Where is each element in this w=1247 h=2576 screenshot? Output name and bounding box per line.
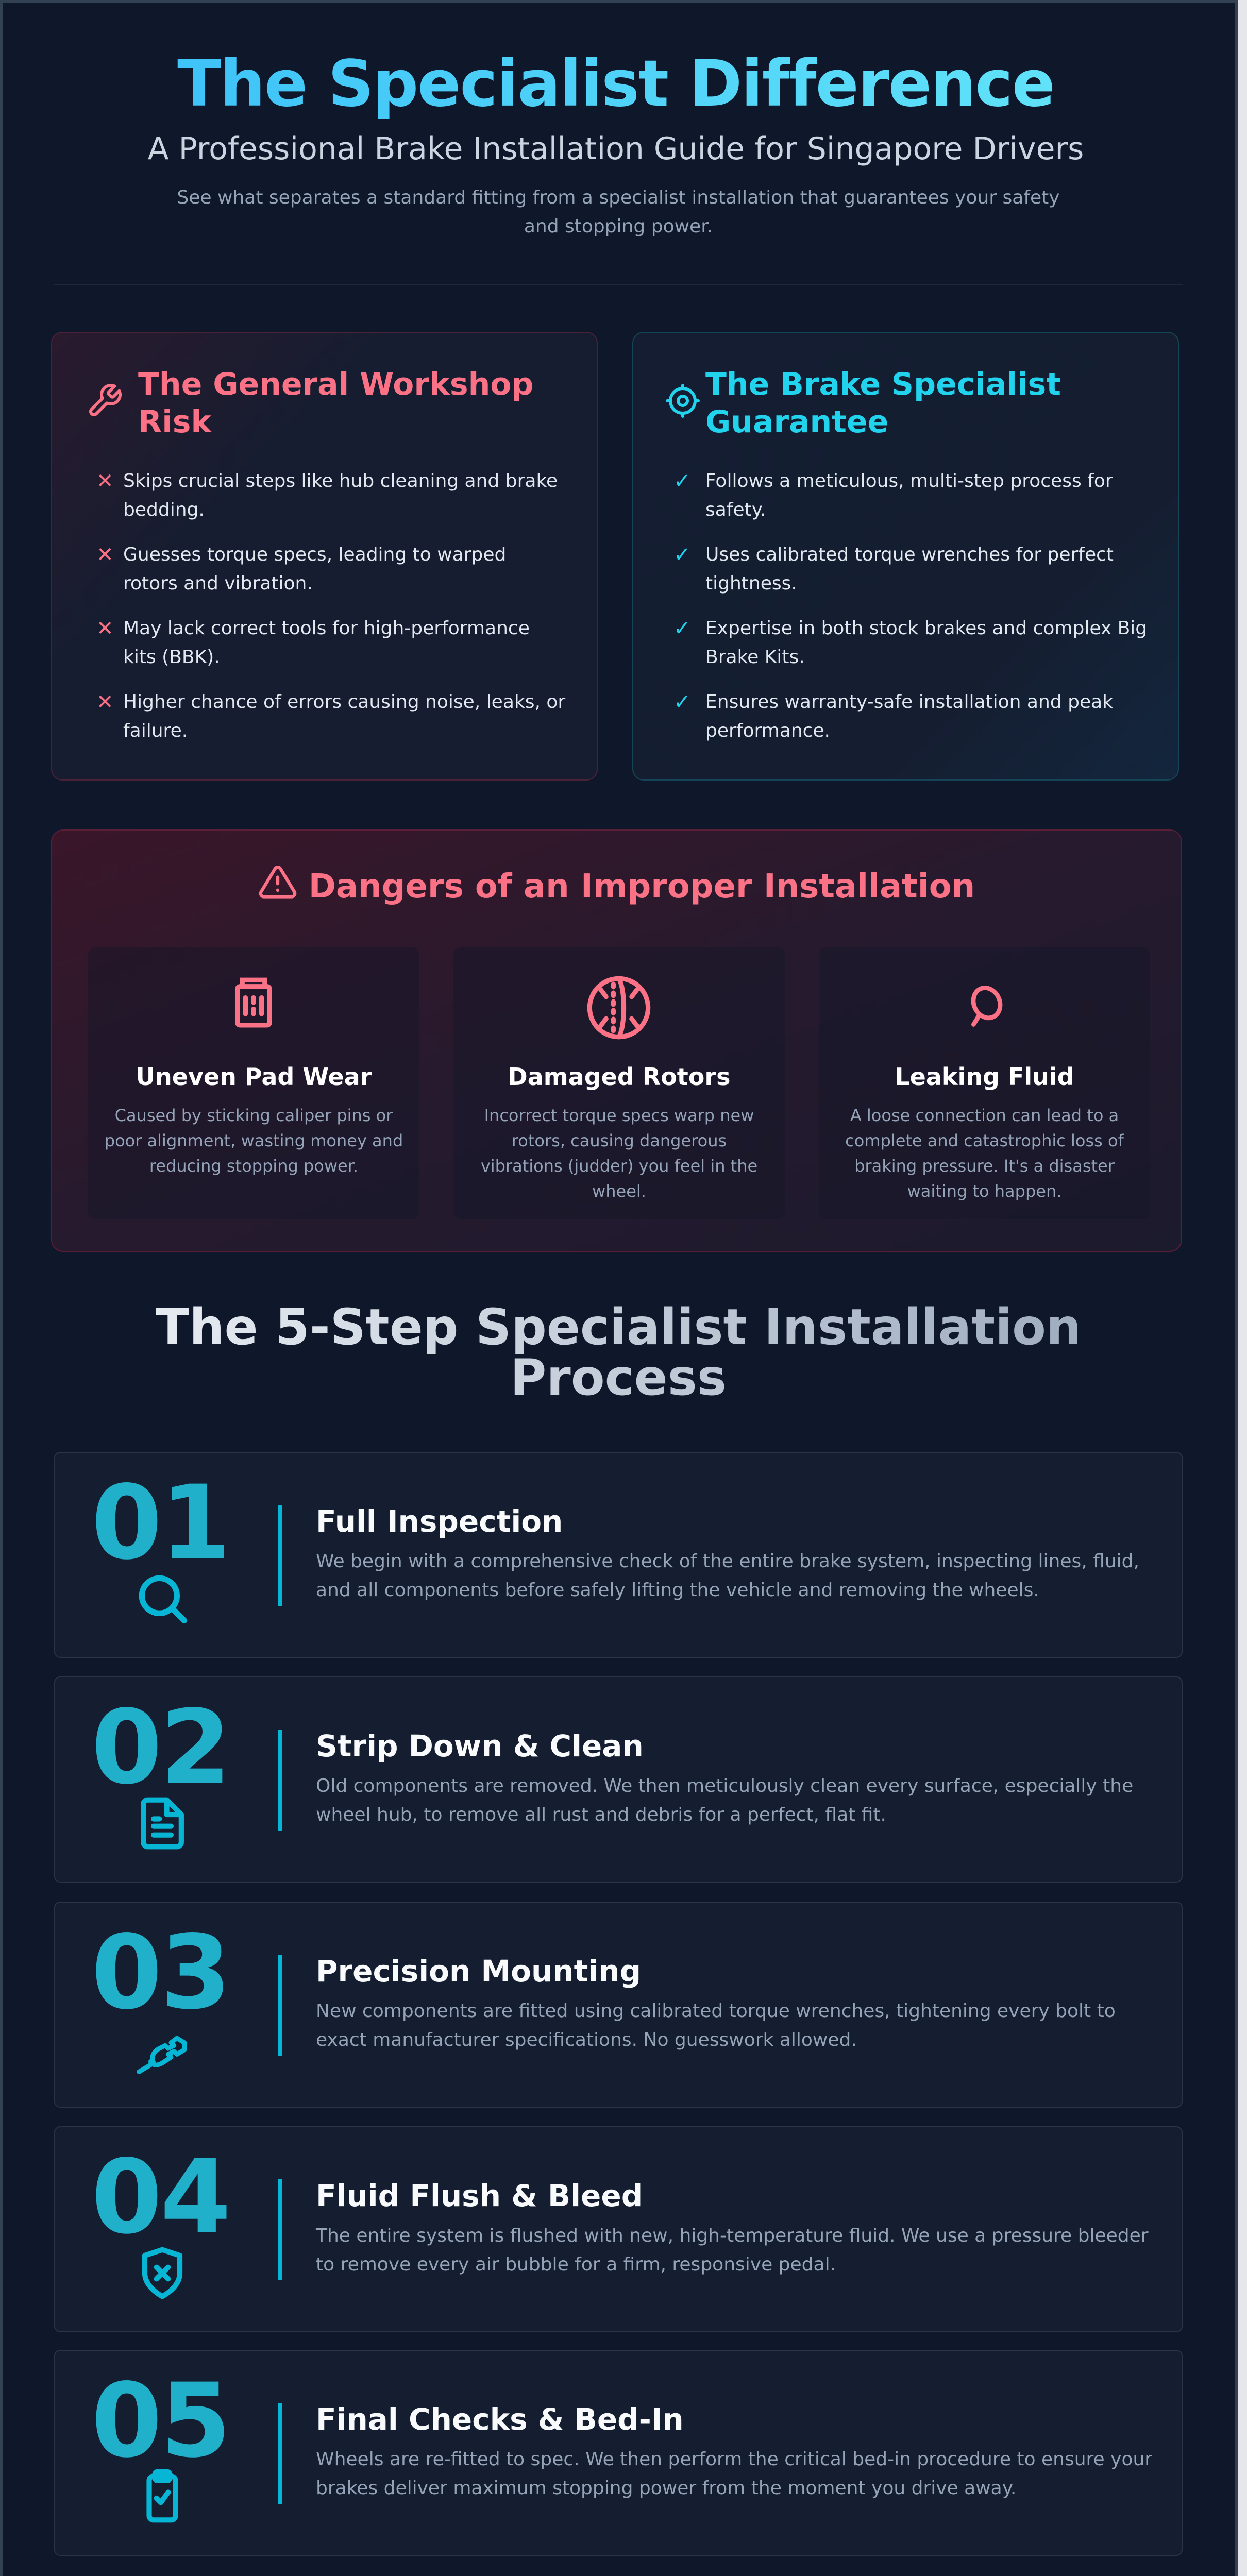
icon: magnifier: [139, 1575, 188, 1624]
intro text: [177, 187, 1060, 237]
icon: document: [141, 1797, 184, 1850]
step 3: [54, 1902, 1183, 2108]
list: guarantees: Ensures warranty-safe installation and peak performance.: [705, 691, 1113, 741]
step 3: 03: [91, 1913, 229, 2032]
step 5: Wheels are re-fitted to spec. We then perform the critical bed-in procedure to ensure your brakes deliver maximum stopping power from the moment you drive away.: [316, 2449, 1152, 2499]
list: risks: ✕: [96, 469, 114, 493]
step 1: [54, 1452, 1183, 1658]
step 5: 05: [91, 2361, 229, 2480]
step 5: [54, 2350, 1183, 2556]
list: risks: ✕: [96, 690, 114, 714]
step 4: [54, 2126, 1183, 2332]
list: risks: [96, 469, 566, 741]
card: leaking fluid: A loose connection can lead to a complete and catastrophic loss of braking pressure. It's a disaster waiting to happen.: [845, 1106, 1124, 1201]
list: risks: ✕: [96, 543, 114, 567]
list: risks: May lack correct tools for high-performance kits (BBK).: [123, 618, 530, 668]
list: guarantees: ✓: [673, 690, 691, 714]
step 2: Strip Down & Clean: [316, 1728, 644, 1764]
icon: shield: [142, 2247, 182, 2299]
step 2: Old components are removed. We then meticulously clean every surface, especially the wheel hub, to remove all rust and debris for a perfect, flat fit.: [316, 1775, 1133, 1825]
heading: general workshop: The General Workshop Risk: [138, 366, 533, 440]
step 1: We begin with a comprehensive check of the entire brake system, inspecting lines, fluid, and all components before safely lifting the vehicle and removing the wheels.: [316, 1551, 1139, 1601]
heading: dangers: Dangers of an Improper Installation: [309, 868, 975, 906]
process heading: The 5-Step Specialist Installation: [156, 1298, 1081, 1356]
panel: dangers: [51, 829, 1182, 1252]
panel: brake specialist guarantee: [632, 332, 1179, 781]
list: guarantees: Uses calibrated torque wrenches for perfect tightness.: [705, 544, 1114, 594]
title: [0, 45, 1232, 123]
step 1: 01: [91, 1463, 229, 1582]
step 3: New components are fitted using calibrated torque wrenches, tightening every bolt to exact manufacturer specifications. No guesswork allowed.: [316, 2001, 1116, 2050]
list: risks: Skips crucial steps like hub cleaning and brake bedding.: [123, 470, 558, 520]
process heading: Process: [510, 1349, 727, 1406]
list: guarantees: Follows a meticulous, multi-step process for safety.: [705, 470, 1113, 520]
step 2: [54, 1676, 1183, 1883]
card: damaged rotors: Damaged Rotors: [508, 1063, 730, 1091]
icon: wrench: [89, 384, 122, 416]
list: guarantees: Expertise in both stock brakes and complex Big Brake Kits.: [705, 618, 1147, 668]
step 2: 02: [91, 1688, 229, 1807]
step 4: The entire system is flushed with new, high-temperature fluid. We use a pressure bleeder to remove every air bubble for a firm, responsive pedal.: [316, 2225, 1149, 2275]
step 5: Final Checks & Bed-In: [316, 2402, 684, 2437]
card: leaking fluid: [819, 947, 1150, 1219]
card: uneven pad wear: Uneven Pad Wear: [136, 1063, 372, 1091]
card: damaged rotors: [453, 947, 785, 1219]
list: risks: Higher chance of errors causing noise, leaks, or failure.: [123, 691, 565, 741]
intro text: See what separates a standard fitting from a specialist installation that guarantees your safety: [177, 187, 1060, 208]
icon: pad: [235, 978, 272, 1027]
panel: general workshop risk: [51, 332, 598, 781]
list: risks: ✕: [96, 617, 114, 640]
icon: target: [666, 384, 700, 418]
list: guarantees: ✓: [673, 469, 691, 493]
icon: torque wrench: [137, 2036, 187, 2074]
card: uneven pad wear: Caused by sticking caliper pins or poor alignment, wasting money and reducing stopping power.: [105, 1106, 403, 1176]
icon: rotor: [587, 976, 650, 1040]
title: The Specialist Difference: [177, 47, 1054, 121]
list: risks: Guesses torque specs, leading to warped rotors and vibration.: [123, 544, 506, 594]
icon: fluid: [971, 986, 1003, 1027]
list: guarantees: ✓: [673, 617, 691, 640]
subtitle: A Professional Brake Installation Guide for Singapore Drivers: [148, 131, 1084, 167]
step 4: 04: [91, 2138, 229, 2257]
list: guarantees: ✓: [673, 543, 691, 567]
card: damaged rotors: Incorrect torque specs warp new rotors, causing dangerous vibrations (judder) you feel in the wheel.: [481, 1106, 757, 1201]
intro text: and stopping power.: [524, 216, 713, 237]
process heading: [0, 1302, 1237, 1403]
heading: specialist: The Brake Specialist Guarantee: [705, 366, 1061, 440]
step 3: Precision Mounting: [316, 1954, 641, 1989]
icon: clipboard: [146, 2469, 178, 2522]
step 4: Fluid Flush & Bleed: [316, 2178, 643, 2213]
card: leaking fluid: Leaking Fluid: [895, 1063, 1074, 1091]
list: guarantees: [673, 469, 1147, 741]
step 1: Full Inspection: [316, 1504, 563, 1539]
card: uneven pad wear: [88, 947, 419, 1219]
